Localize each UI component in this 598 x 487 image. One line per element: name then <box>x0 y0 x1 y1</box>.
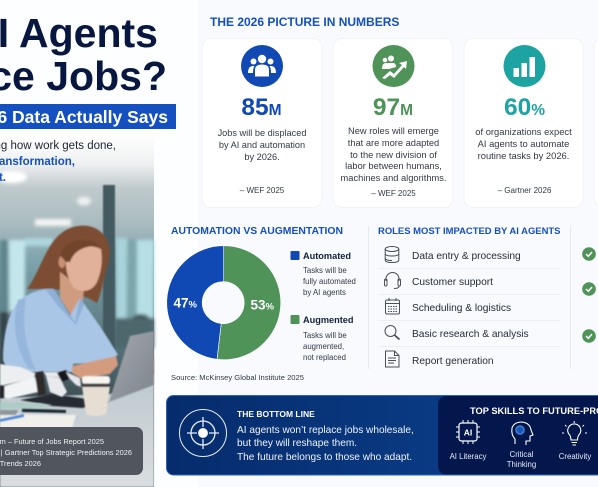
icon: bar chart <box>504 45 546 87</box>
coffee cup <box>82 376 110 416</box>
legend: augmented: Tasks will be <box>303 331 347 340</box>
donut chart <box>167 246 281 360</box>
description: routine tasks by 2026. <box>478 150 569 161</box>
source: – Gartner 2026 <box>498 186 552 195</box>
robot arm <box>0 364 81 399</box>
check marks <box>582 247 596 343</box>
role: customer support: Customer support <box>412 277 493 288</box>
chart source: Source: McKinsey Global Institute 2025 <box>171 373 304 382</box>
icon: AI chip <box>456 420 480 444</box>
stat: 97M <box>373 94 413 121</box>
label: Critical Thinking: Thinking <box>507 460 536 469</box>
legend: automated: by AI agents <box>303 288 346 297</box>
icon: target <box>180 410 226 456</box>
label: Critical Thinking <box>507 450 536 469</box>
card: partially cropped <box>594 38 598 208</box>
card: 85M <box>202 38 322 208</box>
description: Jobs will be displaced <box>218 128 306 138</box>
shirt <box>3 289 118 372</box>
card: 97M <box>333 38 453 208</box>
desk items <box>0 402 76 428</box>
description: to the new division of <box>350 150 437 160</box>
panel: roles most impacted <box>378 226 561 367</box>
description: labor between humans, <box>345 161 442 171</box>
icon: people <box>241 45 283 87</box>
legend: augmented: Augmented <box>303 315 354 325</box>
description <box>218 128 306 162</box>
icon: headset <box>384 272 400 288</box>
description: AI agents to automate <box>478 138 569 149</box>
legend: automated: fully automated <box>303 277 356 286</box>
source: – WEF 2025 <box>240 186 285 195</box>
role: data entry: Data entry & processing <box>412 251 521 262</box>
stat: 60% <box>504 94 545 121</box>
legend: augmented: augmented, <box>303 342 344 351</box>
heading: numbers: THE 2026 PICTURE IN NUMBERS <box>210 15 399 29</box>
description: of organizations expect <box>475 126 572 137</box>
legend: automated <box>290 251 356 297</box>
icon: light bulb <box>562 421 587 445</box>
description <box>475 126 572 161</box>
source: – WEF 2025 <box>371 189 416 198</box>
laptop <box>20 331 154 408</box>
intro text <box>0 140 116 184</box>
role: basic research: Basic research & analysis <box>412 329 529 340</box>
photo: woman at laptop with robot hand <box>0 135 154 487</box>
panel: bottom line <box>166 396 598 475</box>
heading: THE BOTTOM LINE <box>237 409 315 419</box>
description: by AI and automation <box>219 140 305 150</box>
message: The future belongs to those who adapt. <box>237 452 412 463</box>
heading: ROLES MOST IMPACTED BY AI AGENTS <box>378 226 560 237</box>
neck <box>60 272 84 318</box>
description <box>341 126 446 183</box>
label: Critical Thinking: Critical <box>510 450 534 459</box>
desk <box>0 384 154 487</box>
title <box>0 10 167 99</box>
forearm and hand <box>72 356 118 379</box>
icon: document <box>386 351 399 367</box>
panel: top skills <box>438 396 598 474</box>
card: 60% <box>464 38 583 208</box>
label: 53%: 53% <box>250 298 275 312</box>
sources caption box <box>0 427 143 475</box>
legend: automated: Tasks will be <box>303 266 347 275</box>
role: report generation: Report generation <box>412 356 494 367</box>
icon: database <box>385 246 399 262</box>
label: Creativity: Creativity <box>559 452 591 461</box>
hair <box>27 226 110 303</box>
icon: AI chip: AI <box>464 428 472 438</box>
legend: augmented: not replaced <box>303 353 346 362</box>
icon: calendar <box>386 298 400 314</box>
icon: head with gear <box>512 422 533 445</box>
legend: automated: Automated <box>303 251 351 261</box>
message: but they will reshape them. <box>237 438 357 449</box>
stat: 85M <box>241 94 282 121</box>
description: that are more adapted <box>348 138 439 148</box>
heading: automation vs augmentation: AUTOMATION VS AUGMENTATION <box>171 226 343 237</box>
description: New roles will emerge <box>348 126 439 136</box>
icon: magnifier <box>385 326 400 340</box>
message <box>237 425 414 463</box>
icon: people with growth arrow <box>372 45 414 87</box>
left column background <box>0 0 198 487</box>
legend: augmented <box>290 315 354 362</box>
label: AI Literacy: AI Literacy <box>450 452 487 461</box>
message: AI agents won’t replace jobs wholesale, <box>237 425 414 436</box>
face <box>66 246 102 291</box>
role: scheduling: Scheduling & logistics <box>412 303 511 314</box>
description: machines and algorithms. <box>341 173 446 183</box>
label: 47%: 47% <box>174 296 198 310</box>
panel dividers <box>368 226 570 369</box>
description: by 2026. <box>244 152 280 162</box>
